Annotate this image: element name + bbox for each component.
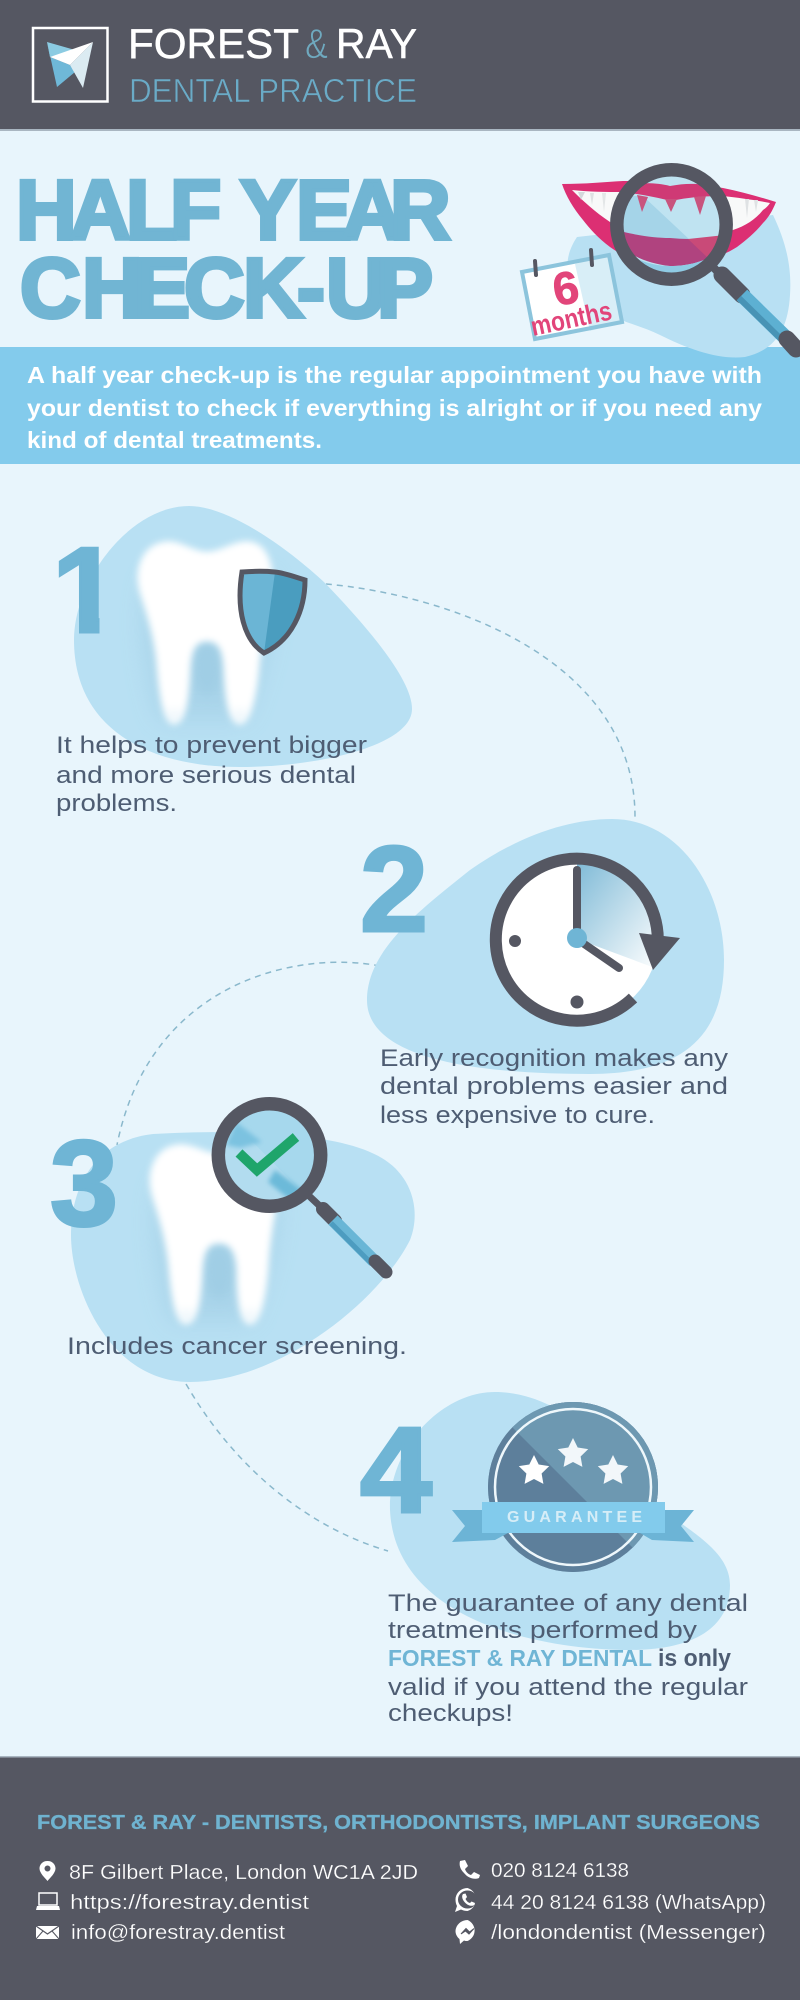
logo frame [33,28,108,102]
ribbon: GUARANTEE [507,1509,642,1526]
intro text: A half year check-up is the regular appointment you have with [27,362,762,388]
step 2 text: dental problems easier and [380,1073,728,1100]
smiling lips [562,181,776,266]
clock arrowhead [639,933,680,970]
blob 1 [74,506,412,767]
icon: laptop [36,1893,60,1910]
hero blob [568,215,790,358]
six months calendar: 6 [549,260,583,316]
phone row: 020 8124 6138 [491,1860,629,1882]
panel: step 2 [360,819,728,1129]
icon: whatsapp [455,1888,477,1912]
hero illustration [522,170,796,358]
step 4 text: is only [658,1645,732,1672]
tooth icon with magnifier [151,1104,386,1323]
blob 2 [367,819,724,1074]
whatsapp row: 44 20 8124 6138 (WhatsApp) [491,1892,766,1914]
messenger row: /londondentist (Messenger) [491,1922,766,1944]
logo wordmark [128,20,417,109]
step 4 text: treatments performed by [388,1617,697,1644]
step 1 text: problems. [56,790,177,817]
number 4: 4 [360,1402,432,1538]
six months calendar: months [528,295,614,342]
title [16,163,451,335]
number 2: 2 [360,821,428,957]
step 2 text: Early recognition makes any [380,1045,728,1072]
email row: info@forestray.dentist [71,1922,285,1944]
step 4 text [388,1590,748,1727]
footer band [0,1756,800,2000]
header band [0,0,800,131]
magnifier lens view [624,176,720,272]
stars [519,1438,628,1484]
title: HALF YEAR [16,163,451,257]
logo wordmark: DENTAL PRACTICE [129,72,417,109]
panel: step 4 [360,1392,748,1727]
dashed connector 1 to 2 [326,584,635,817]
magnifier [617,170,796,349]
step 4 text: checkups! [388,1700,513,1727]
clock icon [496,858,680,1021]
step 1 text: and more serious dental [56,762,356,789]
step 4 text: FOREST & RAY DENTAL [388,1645,652,1671]
six months calendar [522,250,622,342]
footer heading: FOREST & RAY - DENTISTS, ORTHODONTISTS, IMPLANT SURGEONS [37,1812,760,1834]
logo wordmark: FOREST [128,20,299,67]
intro band [0,347,800,464]
step 2 text [380,1045,728,1129]
shield [240,571,305,653]
number 1: 1 [52,522,120,658]
blob 4 [390,1392,730,1650]
logo wordmark: & [305,20,328,67]
logo tooth dart icon [47,42,93,88]
guarantee badge [452,1402,694,1572]
blob 3 [71,1132,415,1382]
icon: messenger [456,1920,475,1944]
panel: step 1 [52,506,412,817]
title: CHECK-UP [20,241,433,335]
step 4 text: The guarantee of any dental [388,1590,748,1617]
dashed connector 3 to 4 [186,1384,388,1551]
step 2 text: less expensive to cure. [380,1102,655,1129]
magnifier lens and check mark [218,1104,386,1272]
logo wordmark: RAY [336,20,417,67]
icon: phone [460,1860,480,1879]
logo [33,20,417,109]
step 4 text: valid if you attend the regular [388,1674,748,1701]
ribbon [452,1502,694,1542]
address row: 8F Gilbert Place, London WC1A 2JD [69,1862,418,1884]
intro text: kind of dental treatments. [27,427,322,453]
intro text: your dentist to check if everything is alright or if you need any [27,395,762,421]
icon: envelope [36,1926,59,1939]
website row: https://forestray.dentist [70,1892,310,1914]
tooth icon with shield [139,543,305,723]
icon: map pin [40,1861,56,1881]
step 1 text: It helps to prevent bigger [56,732,367,759]
panel: step 3 [50,1104,415,1382]
number 3: 3 [50,1115,118,1251]
intro text [27,362,762,453]
dashed connector 2 to 3 [117,962,380,1145]
step 1 text [56,732,367,817]
step 3 text: Includes cancer screening. [67,1333,407,1360]
